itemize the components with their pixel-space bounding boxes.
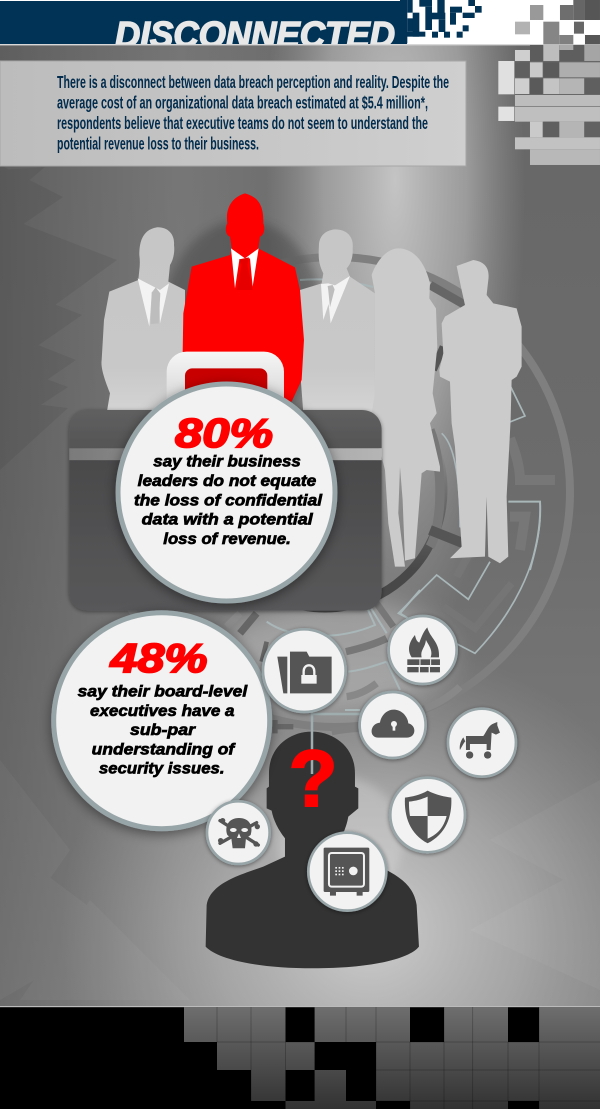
callout text: the loss of confidential [134,492,323,509]
icon: shield [390,778,465,852]
pixel blocks beside intro panel [498,45,600,165]
callout: 48 percent [54,613,270,829]
intro text: potential revenue loss to their business. [57,134,259,154]
man silhouette left [101,227,185,413]
stat: 48%: 48% [109,635,208,681]
callout text: say their business [153,454,301,470]
header banner [0,0,600,46]
pixel blocks top right [515,0,600,44]
man silhouette far right [439,260,522,563]
callout text [134,454,323,548]
callout text: understanding of [92,741,236,758]
icon: skull and crossbones [207,801,270,864]
briefcase handle [167,352,284,425]
icon: locked folder [263,629,346,712]
intro panel [0,61,466,166]
icon: safe [308,833,386,911]
callout text: sub-par [130,722,196,739]
briefcase [69,352,382,611]
footer pixel band [0,1006,600,1109]
callout text: security issues. [99,760,224,778]
red executive silhouette [183,193,304,402]
callout text: loss of revenue. [163,531,291,548]
icon: trojan horse [448,709,516,777]
callout text: data with a potential [142,512,313,529]
callout: 80 percent [118,384,335,601]
intro text [57,72,449,154]
callout text: say their board-level [78,684,248,701]
man silhouette centre right [298,229,375,413]
navy pixel pattern [400,0,482,43]
woman silhouette [372,248,440,567]
background maze [100,257,570,733]
icon: cloud lock [360,692,426,758]
stat: 80%: 80% [175,410,273,456]
title: DISCONNECTED [115,14,395,55]
callout text: leaders do not equate [138,473,317,490]
question mark: ? [289,734,337,823]
icon circles [207,616,516,911]
head silhouette with question mark [206,732,419,968]
callout text: executives have a [90,703,235,720]
connector lines [312,712,365,774]
briefcase body [69,410,382,611]
people silhouettes group [101,193,522,567]
callout text [78,684,248,778]
icon: firewall [389,616,457,684]
